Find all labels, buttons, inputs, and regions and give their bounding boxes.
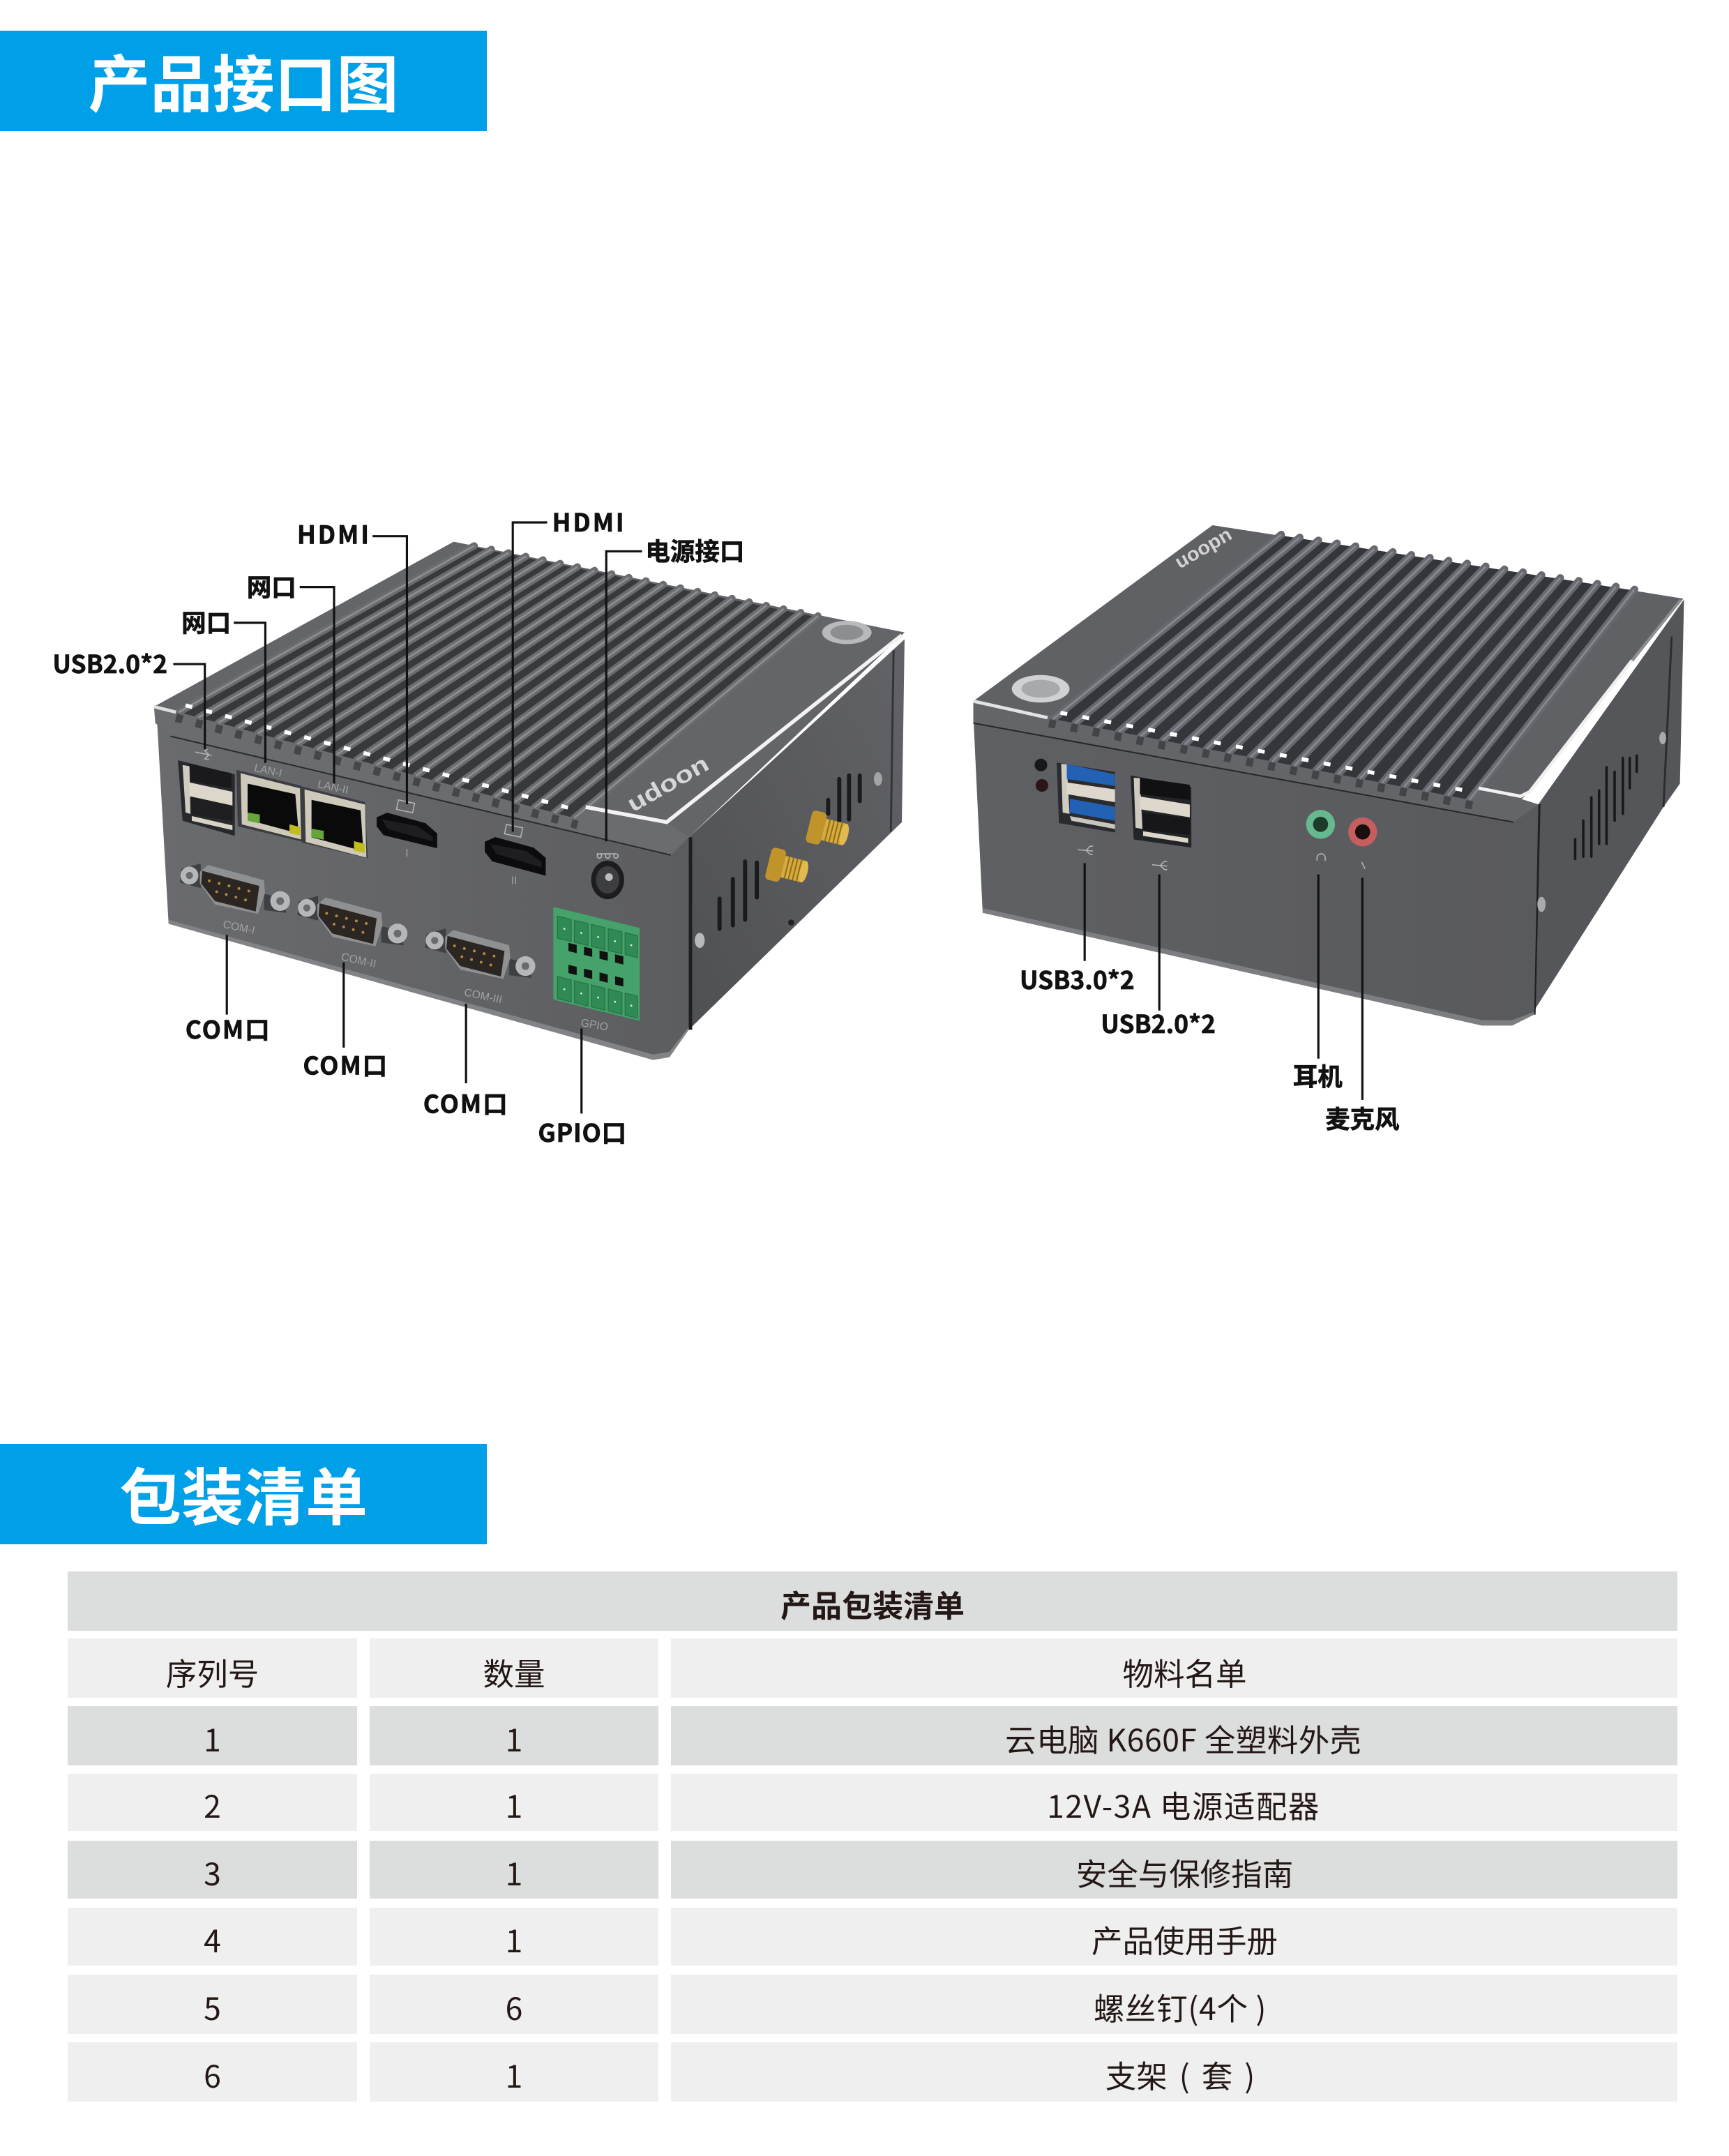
heading: product ports	[0, 31, 487, 131]
table row 4: 产品使用手册	[1092, 1916, 1278, 1961]
HDMI ports: II	[511, 875, 518, 887]
table row 3: 安全与保修指南	[1076, 1849, 1293, 1894]
USB 2.0 port stack	[1131, 776, 1191, 870]
COM port I	[180, 864, 290, 914]
LAN ports: LAN-II	[317, 778, 349, 797]
callout COM 1: COM口	[186, 1011, 271, 1046]
power jack	[591, 854, 624, 899]
table: packing list	[68, 1571, 1677, 2102]
table row 2	[68, 1774, 1677, 1831]
table row 1: 1	[204, 1715, 221, 1761]
table row 6: 支架 ( 套 )	[1105, 2051, 1255, 2097]
table title row	[68, 1571, 1677, 1631]
table row 3: 3	[204, 1849, 221, 1894]
indicator lights	[1034, 759, 1048, 792]
table header row: 物料名单	[1122, 1649, 1247, 1694]
callout LAN 2	[247, 568, 334, 783]
device front face	[154, 707, 689, 1060]
callout HDMI 1: HDMI	[297, 516, 371, 552]
table row 5: 6	[506, 1984, 522, 2029]
callout COM 3: COM口	[423, 1085, 509, 1121]
device side face	[1512, 599, 1684, 1024]
table row 1: 1	[506, 1715, 522, 1761]
GPIO terminal: GPIO	[580, 1017, 609, 1034]
table row 6	[68, 2042, 1677, 2102]
antenna connector 2	[764, 847, 811, 889]
table title row: 产品包装清单	[780, 1581, 965, 1626]
table row 3: 1	[506, 1849, 522, 1894]
callout LAN 1: 网口	[181, 604, 231, 640]
COM labels: COM-II	[340, 951, 377, 970]
COM labels: COM-III	[463, 987, 503, 1007]
table row 1: 云电脑 K660F 全塑料外壳	[1005, 1715, 1361, 1761]
table header row	[68, 1638, 1677, 1698]
callout HDMI 2	[513, 504, 626, 831]
COM port III	[425, 928, 536, 979]
HDMI ports: I	[405, 847, 409, 859]
USB 3.0 port stack	[1057, 762, 1115, 854]
heading: packing list: 包装清单	[119, 1448, 368, 1538]
table row 4: 4	[204, 1916, 221, 1961]
callout microphone: 麦克风	[1325, 1100, 1400, 1136]
GPIO terminal	[553, 907, 640, 1034]
callout labels: left device	[52, 504, 744, 1149]
table row 2: 1	[506, 1781, 522, 1827]
device front face	[974, 701, 1539, 1025]
illustration: right device front view	[974, 525, 1684, 1025]
callout COM 2: COM口	[303, 1046, 388, 1082]
callout HDMI 1	[297, 516, 407, 804]
table row 2: 2	[204, 1781, 221, 1827]
heading: product ports: 产品接口图	[88, 35, 399, 125]
callout USB2.0: USB2.0*2	[52, 645, 167, 681]
table header row: 序列号	[166, 1649, 259, 1694]
table row 4	[68, 1908, 1677, 1966]
table row 6: 6	[204, 2051, 221, 2097]
table row 2: 12V-3A 电源适配器	[1047, 1781, 1320, 1827]
callout power: 电源接口	[645, 532, 744, 568]
callout LAN 2: 网口	[247, 568, 296, 603]
callout LAN 1	[181, 604, 265, 763]
callout USB2.0	[52, 645, 205, 749]
logo: udoon	[1172, 526, 1237, 575]
headphone jack	[1306, 810, 1335, 861]
callout HDMI 2: HDMI	[552, 504, 626, 539]
device side face	[689, 640, 905, 1030]
table row 3	[68, 1841, 1677, 1899]
LAN ports: LAN-I	[253, 762, 283, 780]
microphone jack	[1348, 817, 1377, 869]
callout power	[606, 532, 744, 841]
callout USB2.0: USB2.0*2	[1101, 1005, 1216, 1041]
table header row: 数量	[483, 1649, 545, 1694]
LAN ports	[236, 762, 368, 859]
table row 5	[68, 1975, 1677, 2034]
logo: udoon	[623, 751, 714, 817]
callout labels: right device	[1020, 863, 1400, 1136]
table row 6: 1	[506, 2051, 522, 2097]
illustration: left device rear view	[154, 542, 905, 1060]
USB 2.0 port stack	[178, 749, 235, 836]
heading: packing list	[0, 1444, 487, 1544]
COM labels: COM-I	[222, 919, 256, 937]
callout headphones: 耳机	[1293, 1057, 1343, 1093]
table row 5: 螺丝钉(4个 )	[1094, 1984, 1267, 2029]
COM labels	[222, 919, 503, 1007]
COM port II	[298, 896, 407, 947]
table row 1	[68, 1706, 1677, 1765]
antenna connector 1	[805, 810, 852, 852]
callout GPIO: GPIO口	[538, 1114, 627, 1149]
device top with heat-sink fins	[154, 542, 905, 1060]
callout USB3.0: USB3.0*2	[1020, 961, 1135, 997]
LAN 1	[236, 770, 304, 842]
LAN 2	[301, 786, 368, 859]
HDMI ports	[377, 800, 546, 887]
device top with heat-sink fins	[974, 525, 1683, 1025]
table row 5: 5	[204, 1984, 221, 2029]
table row 4: 1	[506, 1916, 522, 1961]
